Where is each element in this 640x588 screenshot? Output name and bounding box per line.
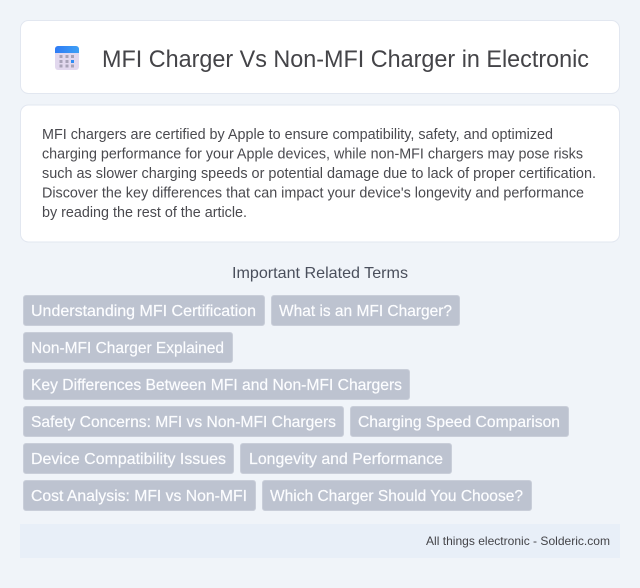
heading: related terms: Important Related Terms — [232, 265, 408, 282]
tag — [24, 480, 256, 510]
tag — [240, 444, 452, 474]
footer text: All things electronic - Solderic.com — [426, 534, 610, 548]
tag: Key Differences Between MFI and Non-MFI Chargers — [31, 377, 402, 394]
panel: description — [20, 105, 620, 242]
tag: Longevity and Performance — [249, 451, 443, 468]
tag — [24, 444, 234, 474]
text block: description: Discover the key differences that can impact your device's longevity and performance — [42, 186, 584, 202]
panel: term tags — [24, 296, 568, 510]
text block: description: by reading the rest of the article. — [42, 205, 247, 221]
tag: Which Charger Should You Choose? — [270, 488, 523, 505]
tag — [24, 296, 264, 326]
tag — [24, 406, 344, 436]
panel: header — [20, 20, 620, 94]
tag: Understanding MFI Certification — [31, 303, 256, 320]
tag — [272, 296, 460, 326]
tag: Charging Speed Comparison — [358, 414, 560, 431]
tag — [350, 406, 568, 436]
footer — [20, 524, 620, 558]
icon: calendar — [55, 46, 79, 70]
tag — [262, 480, 532, 510]
text block: description: such as slower charging speeds or potential damage due to lack of proper certification. — [42, 166, 596, 182]
tag: Cost Analysis: MFI vs Non-MFI — [31, 488, 247, 505]
tag: What is an MFI Charger? — [279, 303, 452, 320]
tag: Device Compatibility Issues — [31, 451, 226, 468]
text block: description: MFI chargers are certified by Apple to ensure compatibility, safety, and optimized — [42, 127, 553, 143]
tag: Safety Concerns: MFI vs Non-MFI Chargers — [31, 414, 336, 431]
tag — [24, 370, 410, 400]
title: MFI Charger Vs Non-MFI Charger in Electronic — [102, 46, 589, 73]
text block: description — [42, 127, 596, 221]
tag: Non-MFI Charger Explained — [31, 340, 224, 357]
tag — [24, 332, 232, 362]
text block: description: charging performance for your Apple devices, while non-MFI chargers may pose risks — [42, 146, 583, 162]
